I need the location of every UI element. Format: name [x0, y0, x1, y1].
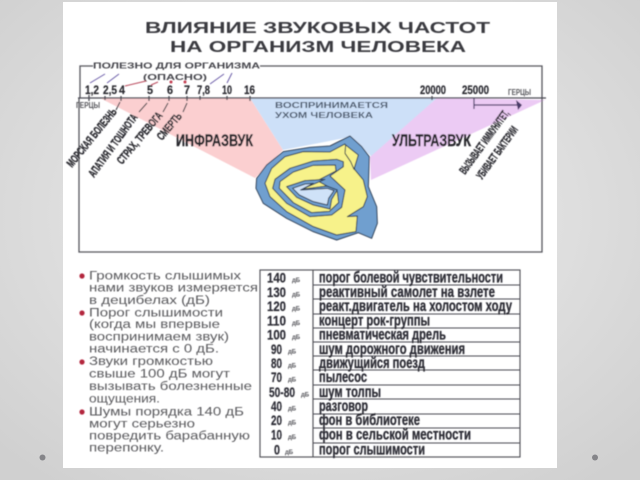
sound sources: порог болевой чувствительности	[319, 270, 503, 286]
bullets	[79, 273, 85, 415]
bullet lines	[89, 270, 258, 454]
rotated effects: ultrasound	[458, 108, 521, 182]
rotated effects: ultrasound: УБИВАЕТ БАКТЕРИИ	[475, 125, 521, 182]
frequency values: 10	[222, 85, 232, 97]
table grid	[260, 270, 520, 457]
title: ВЛИЯНИЕ ЗВУКОВЫХ ЧАСТОТ	[145, 20, 490, 37]
sound sources: фон в сельской местности	[319, 426, 471, 444]
title	[145, 20, 490, 56]
title: НА ОРГАНИЗМ ЧЕЛОВЕКА	[170, 39, 467, 56]
bullet lines: вызывать болезненные	[89, 381, 252, 393]
decibel values: 10	[271, 426, 282, 442]
rotated effects: infrasound	[65, 106, 185, 180]
decibel values: дБ	[288, 435, 297, 441]
label: hertz right: ГЕРЦЫ	[508, 88, 531, 97]
decibel values: 20	[271, 412, 282, 428]
decibel values: 120	[267, 298, 286, 314]
label: useful for the organism: ПОЛЕЗНО ДЛЯ ОРГАНИЗМА	[93, 60, 260, 70]
sound sources: реакт.двигатель на холостом ходу	[319, 298, 512, 315]
sound sources: движущийся поезд	[319, 355, 425, 372]
decibel values: дБ	[301, 392, 310, 398]
frequency values: 4	[119, 85, 126, 97]
label: perceived by the human ear: УХОМ ЧЕЛОВЕКА	[275, 111, 373, 120]
decibel values	[267, 270, 310, 458]
icon: right slide dot	[592, 454, 598, 460]
decibel values: 110	[267, 312, 286, 328]
label: perceived by the human ear: ВОСПРИНИМАЕТСЯ	[275, 101, 388, 110]
decibel values: 70	[271, 369, 282, 385]
bullet lines: перепонку.	[89, 442, 164, 454]
frequency values: 20000	[420, 85, 446, 97]
decibel values: 40	[271, 398, 282, 414]
sound sources: порог слышимости	[319, 442, 425, 458]
bullet lines: могут серьезно	[89, 418, 195, 430]
decibel values: 90	[271, 341, 282, 357]
table: decibel levels	[260, 270, 520, 458]
frequency values: 6	[167, 85, 173, 97]
sound sources	[319, 270, 512, 458]
main content	[65, 20, 546, 458]
label: perceived by the human ear	[275, 101, 388, 120]
frequency values	[85, 85, 489, 97]
rotated effects: infrasound: АПАТИЯ И ТОШНОТА	[87, 112, 141, 180]
pointers: dangerous frequencies	[125, 81, 158, 86]
frequency values: 7	[184, 85, 190, 97]
bullet lines: Шумы порядка 140 дБ	[89, 406, 244, 418]
label: infrasound: ИНФРАЗВУК	[176, 131, 253, 150]
frequency values: 5	[147, 85, 154, 97]
decibel values: дБ	[288, 378, 297, 384]
decibel values: 130	[267, 284, 286, 300]
bullet lines: (когда мы впервые	[89, 319, 220, 331]
arrow: ultrasound direction	[474, 98, 518, 109]
bullet lines: начинается с 0 дБ.	[89, 344, 219, 356]
decibel values: 140	[267, 270, 286, 286]
bullet lines: в децибелах (дБ)	[89, 295, 210, 307]
decibel values: 0	[274, 442, 280, 458]
decibel values: дБ	[292, 306, 301, 312]
band: infrasound	[100, 98, 283, 178]
decibel values: дБ	[288, 420, 297, 426]
chart frame	[79, 66, 542, 252]
bullet lines: воспринимаем звук)	[89, 332, 229, 344]
decibel values: дБ	[292, 321, 301, 327]
bullet lines: Громкость слышимых	[89, 270, 241, 282]
rotated effects: infrasound: СТРАХ, ТРЕВОГА	[115, 110, 165, 167]
effect pointers	[116, 102, 187, 112]
pointers: useful frequencies	[90, 73, 232, 84]
sound sources: пневматическая дрель	[319, 326, 446, 344]
frequency axis	[78, 95, 546, 101]
decibel values: дБ	[288, 350, 297, 356]
sound sources: разговор	[319, 398, 368, 415]
sound sources: концерт рок-группы	[319, 312, 430, 330]
rotated effects: infrasound: СМЕРТЬ	[155, 111, 185, 143]
band: ultrasound	[370, 98, 545, 180]
bullet lines: повредить барабанную	[89, 430, 250, 442]
band: audible	[250, 98, 437, 157]
frequency values: 16	[244, 85, 255, 97]
decibel values: дБ	[292, 292, 301, 298]
bullet lines: нами звуков измеряется	[89, 282, 258, 294]
decibel values: дБ	[285, 450, 294, 456]
decibel values: дБ	[288, 364, 297, 370]
frequency chart	[65, 60, 546, 252]
decibel values: дБ	[292, 278, 301, 284]
bullet lines: Звуки громкостью	[89, 356, 213, 368]
decibel values: дБ	[288, 406, 297, 412]
sound sources: шум толпы	[319, 384, 381, 401]
decibel values: 80	[271, 355, 282, 371]
label: hertz left: ГЕРЦЫ	[76, 101, 100, 110]
decibel values: дБ	[292, 335, 301, 341]
frequency values: 1,2	[85, 85, 99, 97]
white panel	[63, 2, 557, 468]
text block: loudness facts	[79, 270, 258, 454]
sound sources: реактивный самолет на взлете	[319, 284, 495, 301]
frequency values: 2,5	[103, 85, 118, 97]
sound sources: пылесос	[319, 369, 367, 386]
decibel values: 100	[267, 326, 286, 342]
icon: ear	[256, 136, 377, 240]
bullet lines: свыше 100 дБ могут	[89, 368, 231, 380]
sound sources: шум дорожного движения	[319, 341, 465, 358]
label: dangerous: (ОПАСНО)	[143, 72, 207, 82]
decibel values: 50-80	[269, 384, 295, 400]
sound sources: фон в библиотеке	[319, 412, 420, 429]
label: ultrasound: УЛЬТРАЗВУК	[392, 131, 471, 150]
icon: left slide dot	[40, 454, 46, 460]
rotated effects: infrasound: МОРСКАЯ БОЛЕЗНЬ	[65, 106, 120, 170]
frequency values: 25000	[462, 85, 489, 97]
bullet lines: ощущения.	[89, 394, 160, 406]
rotated effects: ultrasound: ВЫЗЫВАЕТ ИММУНИТЕТ,	[458, 108, 512, 177]
frequency values: 7,8	[197, 85, 210, 97]
bullet lines: Порог слышимости	[89, 308, 223, 320]
